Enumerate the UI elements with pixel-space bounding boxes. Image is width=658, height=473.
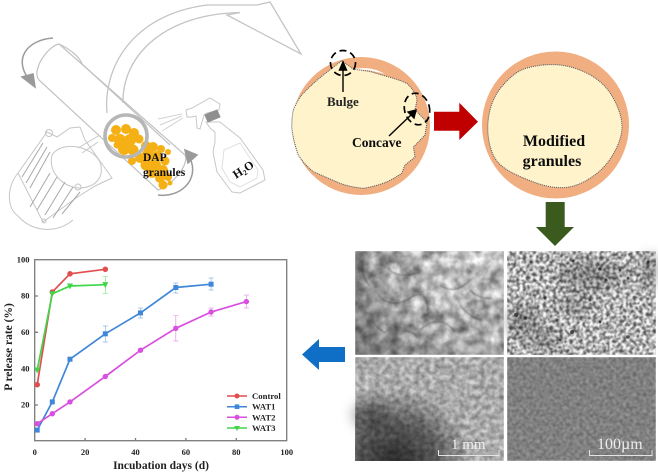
label: Bulge: Bulge [327, 94, 359, 109]
spray lines [158, 114, 183, 131]
legend: Control [252, 391, 281, 401]
callout: bulge marker [330, 50, 356, 92]
y axis title: P release rate (%) [3, 303, 15, 391]
label: Modified granules: granules [523, 153, 581, 170]
label: DAP granules: DAP [143, 152, 167, 164]
arrow: rotation top left [22, 38, 53, 87]
series: WAT1 [35, 278, 214, 432]
label: H2O: H [230, 165, 245, 182]
icon: machine base [9, 127, 112, 229]
SEM panel: bottom right [507, 357, 656, 461]
SEM micrographs [352, 251, 658, 461]
series: WAT3 [35, 277, 108, 372]
arrow: green [536, 202, 574, 246]
label: H2O: O [241, 158, 256, 174]
x axis tick labels: 0 [33, 447, 37, 457]
modified granule [482, 52, 629, 198]
DAP granules cluster [108, 124, 172, 190]
label: DAP granules [143, 152, 186, 179]
series: Control [35, 267, 108, 387]
SEM panel: top left [355, 251, 504, 355]
y axis tick labels: 100 [17, 254, 30, 264]
arrow: blue [302, 339, 345, 370]
x axis tick labels: 100 [280, 447, 293, 457]
x axis tick labels: 60 [182, 447, 190, 457]
label: H2O: 2 [241, 168, 249, 177]
callout: concave marker [389, 90, 433, 136]
label: Modified granules: Modified [523, 133, 585, 150]
legend: WAT2 [252, 412, 276, 422]
arrow: red [434, 103, 478, 140]
magnifier ring [105, 115, 147, 157]
icon: spray bottle [186, 98, 265, 193]
SEM panel: top right [506, 251, 658, 355]
legend: WAT1 [252, 402, 276, 412]
illustration: rotating drum granulator [9, 2, 301, 229]
y axis tick labels: 40 [21, 364, 30, 374]
y axis tick labels: 80 [21, 290, 30, 300]
scale bar: 100 um: 100µm [597, 436, 643, 453]
scale bar: 1 mm: 1 mm [451, 437, 486, 453]
series: WAT2 [35, 295, 249, 426]
plot frame and ticks [35, 260, 287, 441]
icon: transfer outline arrow [107, 2, 301, 113]
scale bar: 100 um [590, 436, 652, 456]
label: Modified granules [523, 133, 585, 170]
label: DAP granules: granules [143, 167, 186, 179]
granule with bulge and concave [292, 50, 433, 195]
line chart: P release rate [3, 254, 293, 472]
x axis tick labels [33, 447, 293, 457]
x axis tick labels: 20 [81, 447, 89, 457]
SEM panel: bottom left [352, 357, 504, 461]
x axis tick labels: 80 [232, 447, 241, 457]
scale bar: 1 mm [438, 437, 499, 456]
y axis tick labels: 20 [21, 400, 30, 410]
arrow: rotation bottom right [158, 150, 197, 195]
y axis tick labels [17, 254, 30, 410]
x axis tick labels: 40 [131, 447, 140, 457]
x axis title: Incubation days (d) [113, 460, 209, 472]
legend [227, 391, 281, 433]
legend: WAT3 [252, 423, 276, 433]
icon: drum tube [37, 44, 186, 190]
y axis tick labels: 60 [21, 327, 30, 337]
label: Concave: Concave [352, 135, 402, 150]
